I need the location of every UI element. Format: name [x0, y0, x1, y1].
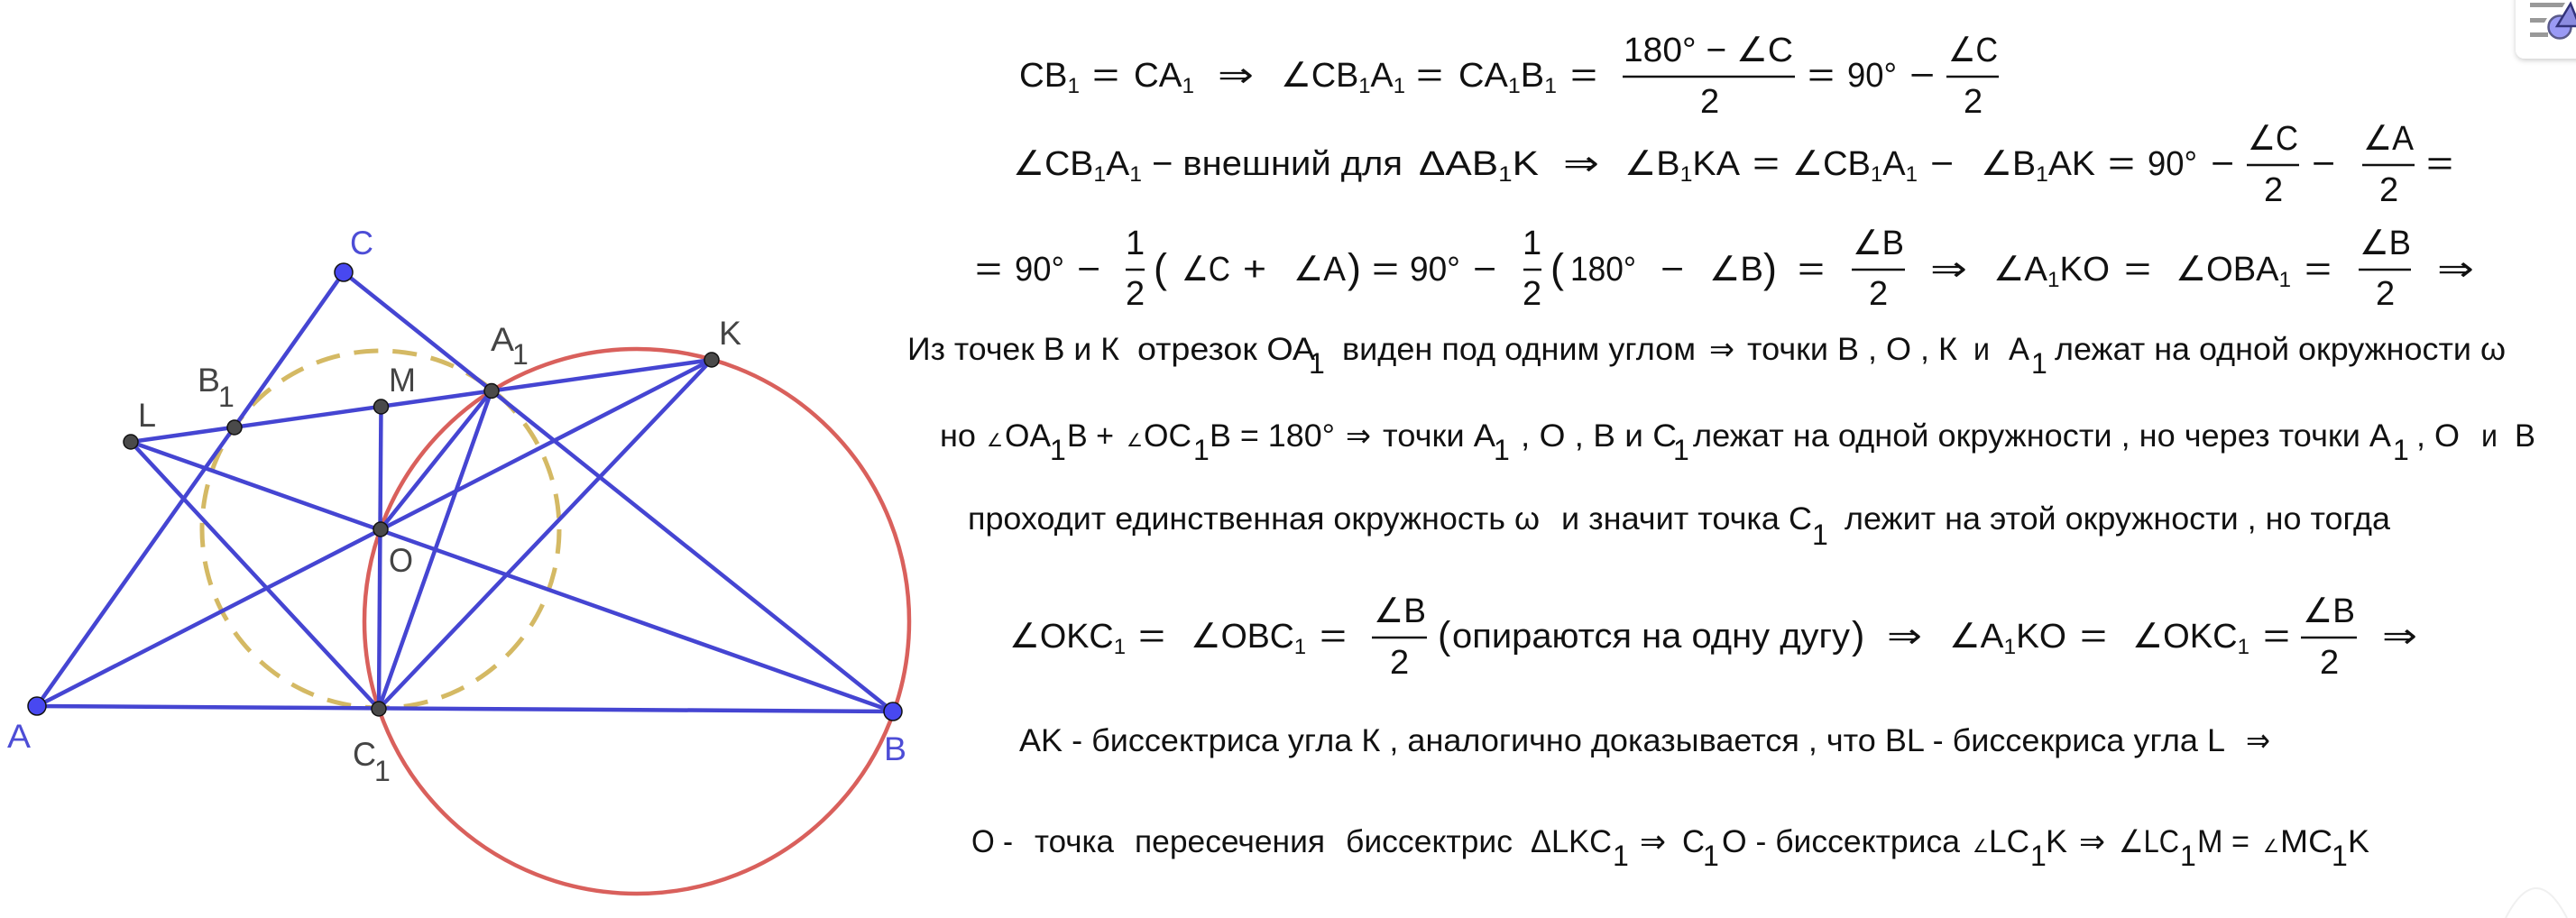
equation line 2: − [2312, 145, 2335, 183]
text line 9: 1 [2332, 840, 2348, 872]
equation line 3: ⇒ [2437, 251, 2474, 289]
text line 5: 1 [1193, 434, 1210, 466]
text line 6: и значит точка С [1561, 501, 1812, 537]
text line 4: 1 [1309, 347, 1325, 380]
equation line 2: 1 [1871, 162, 1882, 187]
text line 9: LC [1989, 824, 2029, 859]
equation line 7: опираются на одну дугу [1452, 618, 1850, 656]
text line 5: , О [2416, 418, 2460, 454]
equation line 2: 2 [2264, 171, 2283, 209]
point labels: 1 [512, 338, 529, 371]
text line 5: но [940, 418, 976, 454]
text line 4: ⇒ [1709, 332, 1734, 367]
point labels: A [7, 718, 31, 755]
equation line 3: = [975, 251, 1002, 289]
equation line 7: ∠A [1949, 618, 2002, 656]
equation line 7: 2 [1390, 644, 1409, 682]
equation line 2: − внешний для [1152, 145, 1403, 183]
text line 9: 1 [1613, 840, 1629, 872]
text line 9: О - [971, 824, 1013, 859]
equation line 2: 1 [1906, 162, 1918, 187]
equation line 1: = [1570, 57, 1597, 95]
equation line 1: 2 [1700, 83, 1719, 121]
equation line 3: − [1473, 251, 1496, 289]
equation line 3: ∠A [1993, 251, 2047, 289]
point labels: B [884, 730, 906, 767]
equation line 1: 1 [1067, 74, 1080, 98]
faint corner arc [2506, 888, 2567, 918]
text line 5: и [2481, 418, 2498, 454]
equation line 3: 2 [1126, 275, 1145, 313]
equation line 7: 1 [2238, 635, 2249, 659]
text line 5: OA [1005, 418, 1052, 454]
equation line 2: 2 [2379, 171, 2398, 209]
equation line 7: ⇒ [1887, 618, 1922, 656]
equation line 7: ⇒ [2382, 618, 2417, 656]
text line 5: ∠ [987, 431, 1003, 451]
equation line 3: ∠OBA [2176, 251, 2278, 289]
equation line 3 [975, 225, 2474, 313]
text line 9: точка [1035, 824, 1115, 859]
text line 4: А [2009, 332, 2030, 367]
equation line 2: K [1513, 145, 1539, 183]
text line 4: виден под одним углом [1342, 332, 1696, 367]
equation line 1: 180° − ∠C [1624, 32, 1793, 69]
point labels: C [350, 225, 373, 262]
equation line 2: A [1106, 145, 1130, 183]
equation line 2: ⇒ [1563, 145, 1599, 183]
text line 9 [971, 824, 2369, 872]
equation line 1: = [1416, 57, 1443, 95]
text line 4: и [1973, 332, 1990, 367]
equation line 7: 2 [2320, 644, 2339, 682]
equation line 3: 90° [1410, 251, 1460, 289]
equation line 7: = [2263, 618, 2290, 656]
text line 9: биссектрис [1346, 824, 1513, 859]
equation line 1: B [1521, 57, 1544, 95]
text line 6 [968, 501, 2391, 551]
equation line 1: ∠C [1948, 32, 1998, 69]
equation line 7: ∠B [1374, 592, 1426, 630]
equation line 2: = [1753, 145, 1780, 183]
equation line 3: ∠B [2360, 225, 2411, 262]
text line 5: , О , В и С [1521, 418, 1677, 454]
text line 9: ⇒ [2079, 824, 2105, 859]
text line 6: проходит единственная окружность ω [968, 501, 1540, 537]
text line 4: лежат на одной окружности ω [2055, 332, 2506, 367]
text line 5: B + [1067, 418, 1114, 454]
text line 5: лежат на одной окружности , но через точки А [1693, 418, 2392, 454]
text line 5: В [2515, 418, 2535, 454]
equation line 2: = [2108, 145, 2135, 183]
points [28, 263, 902, 721]
equation line 7: KO [2016, 618, 2066, 656]
text line 4: Из точек В и К [907, 332, 1120, 367]
equation line 7: 1 [1294, 635, 1306, 659]
text line 8: AK - биссектриса угла К , аналогично доказывается , что BL - биссекриса угла L [1019, 723, 2225, 758]
equation line 3: ∠B [1853, 225, 1904, 262]
text line 4: точки В , О , К [1747, 332, 1958, 367]
equation line 3: 2 [1523, 275, 1541, 313]
text line 9: С [1682, 824, 1705, 859]
equation line 2: ∠A [2363, 120, 2415, 158]
equation line 3: 2 [1869, 275, 1888, 313]
point labels [7, 225, 906, 787]
text line 6: 1 [1812, 519, 1828, 551]
text line 5: 1 [1050, 434, 1066, 466]
equation line 3: 1 [2279, 268, 2291, 292]
equation line 7: = [1138, 618, 1165, 656]
equation line 3: = [1372, 251, 1399, 289]
equation line 2: ΔAB [1419, 145, 1487, 183]
point labels: K [719, 315, 741, 352]
equation line 2: 1 [1129, 162, 1142, 187]
equation line 1: 1 [1508, 74, 1521, 98]
equation line 3: ∠A [1293, 251, 1347, 289]
equation line 3: 2 [2376, 275, 2395, 313]
point labels: 1 [374, 755, 391, 787]
point labels: C [353, 736, 376, 773]
equation line 2: 1 [2036, 162, 2048, 187]
equation line 3: 1 [2047, 268, 2060, 292]
yellow dashed circle [202, 351, 559, 708]
equation line 2: 1 [1680, 162, 1692, 187]
text line 9: M = [2197, 824, 2249, 859]
equation line 3: 1 [1126, 225, 1145, 262]
equation line 3: ( [1550, 245, 1564, 291]
equation line 3: ) [1348, 245, 1361, 291]
text line 9: MC [2280, 824, 2332, 859]
equation line 1: CA [1134, 57, 1182, 95]
equation line 2 [1013, 120, 2453, 209]
text line 5: точки А [1383, 418, 1496, 454]
equation line 3: − [1077, 251, 1100, 289]
text line 9: пересечения [1135, 824, 1325, 859]
equation line 7: ) [1852, 614, 1864, 657]
equation line 2: ∠C [2248, 120, 2298, 158]
point labels: O [389, 542, 413, 579]
equation line 2: − [2211, 145, 2234, 183]
text line 5: B = 180° [1210, 418, 1335, 454]
equation line 3: = [1798, 251, 1825, 289]
equation line 2: A [1882, 145, 1906, 183]
equation line 7: ∠OKC [2132, 618, 2237, 656]
text line 8: ⇒ [2246, 723, 2270, 758]
equation line 1: 2 [1964, 83, 1983, 121]
equation line 3: + [1243, 251, 1266, 289]
equation line 2: ∠CB [1792, 145, 1871, 183]
equation line 1: 1 [1358, 74, 1371, 98]
text line 9: 1 [2180, 840, 2196, 872]
point labels: L [138, 397, 156, 434]
text line 5: ⇒ [1346, 418, 1371, 454]
equation line 7: = [2080, 618, 2107, 656]
equation line 3: 180° [1570, 251, 1636, 289]
text line 4: отрезок ОА [1137, 332, 1316, 367]
equation line 3: ( [1154, 245, 1167, 291]
equation line 2: = [2426, 145, 2453, 183]
equation line 2: ∠CB [1013, 145, 1091, 183]
equation line 2: KA [1692, 145, 1741, 183]
equation line 7: 1 [1114, 635, 1126, 659]
equation line 3: = [2305, 251, 2332, 289]
text line 9: K [2046, 824, 2067, 859]
text line 9: ∠ [1973, 837, 1989, 857]
equation line 1: CB [1019, 57, 1067, 95]
geometry diagram [7, 225, 909, 894]
equation line 7: ∠B [2303, 592, 2355, 630]
text line 9: K [2348, 824, 2369, 859]
equation line 2: − [1930, 145, 1954, 183]
text line 9: ⇒ [1640, 824, 1666, 859]
equation line 3: ∠C [1182, 251, 1230, 289]
equation line 1: = [1092, 57, 1119, 95]
text line 5: 1 [1494, 434, 1510, 466]
equation line 2: 1 [1498, 162, 1513, 187]
equation line 2: ∠B [1624, 145, 1678, 183]
equation line 7 [1009, 592, 2417, 682]
text line 9: 1 [1703, 840, 1719, 872]
equation line 3: 90° [1015, 251, 1064, 289]
text line 9: 1 [2030, 840, 2047, 872]
equation line 3: ∠B [1709, 251, 1763, 289]
equation line 7: ∠OKC [1009, 618, 1114, 656]
text line 4 [907, 332, 2506, 380]
equation line 1: A [1371, 57, 1394, 95]
point labels: M [389, 362, 416, 399]
text line 9: ∠ [2263, 837, 2279, 857]
equation line 2: ∠B [1981, 145, 2034, 183]
text line 4: 1 [2031, 347, 2047, 380]
equation line 2: 1 [1093, 162, 1106, 187]
equation line 7: ∠OBC [1191, 618, 1295, 656]
equation line 2: AK [2048, 145, 2095, 183]
equation line 1 [1019, 32, 1999, 121]
equation line 7: ( [1438, 614, 1451, 657]
text line 5: 1 [1673, 434, 1689, 466]
text line 9: ∠LC [2119, 824, 2179, 859]
equation line 1: 1 [1182, 74, 1194, 98]
equation line 1: ∠CB [1281, 57, 1359, 95]
equation line 1: 1 [1394, 74, 1405, 98]
equation line 3: KO [2060, 251, 2110, 289]
red circle [364, 349, 909, 894]
text line 5: ∠ [1127, 431, 1143, 451]
text line 5: 1 [2393, 434, 2409, 466]
text line 9: ΔLKC [1531, 824, 1612, 859]
equation line 7: = [1320, 618, 1347, 656]
text line 9: О - биссектриса [1722, 824, 1961, 859]
point labels: 1 [218, 381, 235, 413]
text line 5: OC [1144, 418, 1191, 454]
point labels: A [491, 321, 514, 358]
equation line 1: = [1808, 57, 1835, 95]
equation line 3: − [1661, 251, 1684, 289]
icon: toolbar widget [2516, 0, 2576, 59]
equation line 3: = [2124, 251, 2151, 289]
equation line 3: ) [1763, 245, 1777, 291]
text line 5 [940, 418, 2535, 466]
equation line 3: ⇒ [1930, 251, 1967, 289]
triangle ABC and segments [37, 272, 893, 711]
equation line 1: CA [1458, 57, 1506, 95]
equation line 1: − [1909, 57, 1935, 95]
equation line 1: ⇒ [1218, 57, 1254, 95]
text line 6: лежит на этой окружности , но тогда [1845, 501, 2391, 537]
equation line 1: 90° [1847, 57, 1897, 95]
equation line 2: 90° [2148, 145, 2197, 183]
equation line 3: 1 [1523, 225, 1541, 262]
point labels: B [198, 362, 220, 399]
equation line 1: 1 [1544, 74, 1557, 98]
equation line 7: 1 [2003, 635, 2016, 659]
